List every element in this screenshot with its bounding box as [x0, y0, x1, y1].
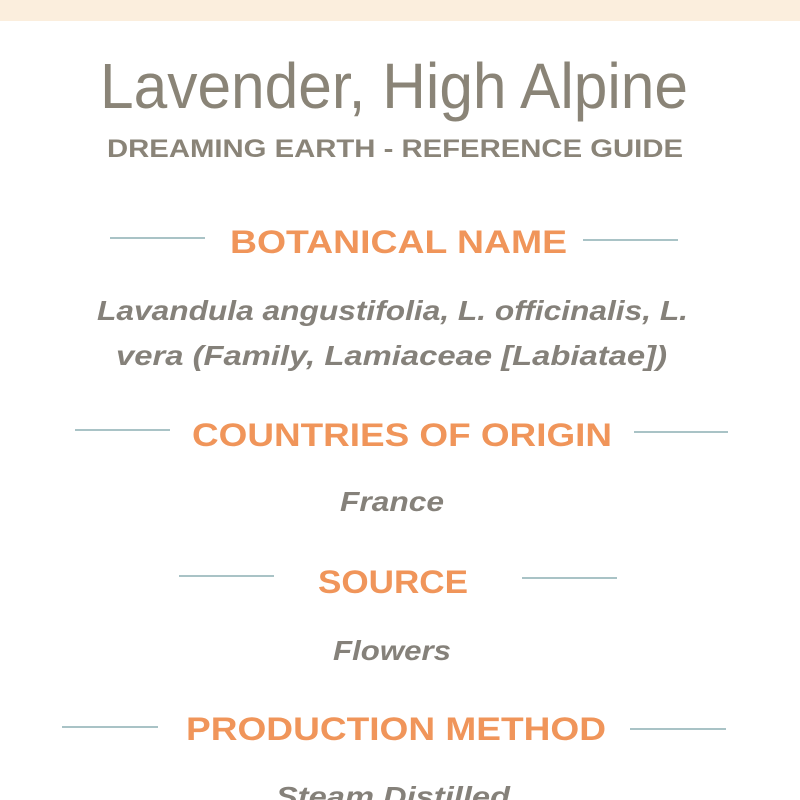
text: botanical name	[97, 295, 688, 371]
heading: countries of origin: COUNTRIES OF ORIGIN	[192, 417, 612, 453]
subtitle: DREAMING EARTH - REFERENCE GUIDE	[107, 135, 683, 163]
heading: botanical name: BOTANICAL NAME	[230, 224, 567, 260]
text: France: France	[340, 486, 444, 517]
text: botanical name: vera (Family, Lamiaceae [Labiatae])	[116, 340, 667, 371]
heading: source: SOURCE	[318, 564, 468, 600]
top band	[0, 0, 800, 21]
heading: production method: PRODUCTION METHOD	[186, 711, 606, 747]
text: Flowers: Flowers	[333, 635, 451, 666]
text: botanical name: Lavandula angustifolia, L. officinalis, L.	[97, 295, 688, 326]
title: Lavender, High Alpine	[100, 50, 688, 122]
